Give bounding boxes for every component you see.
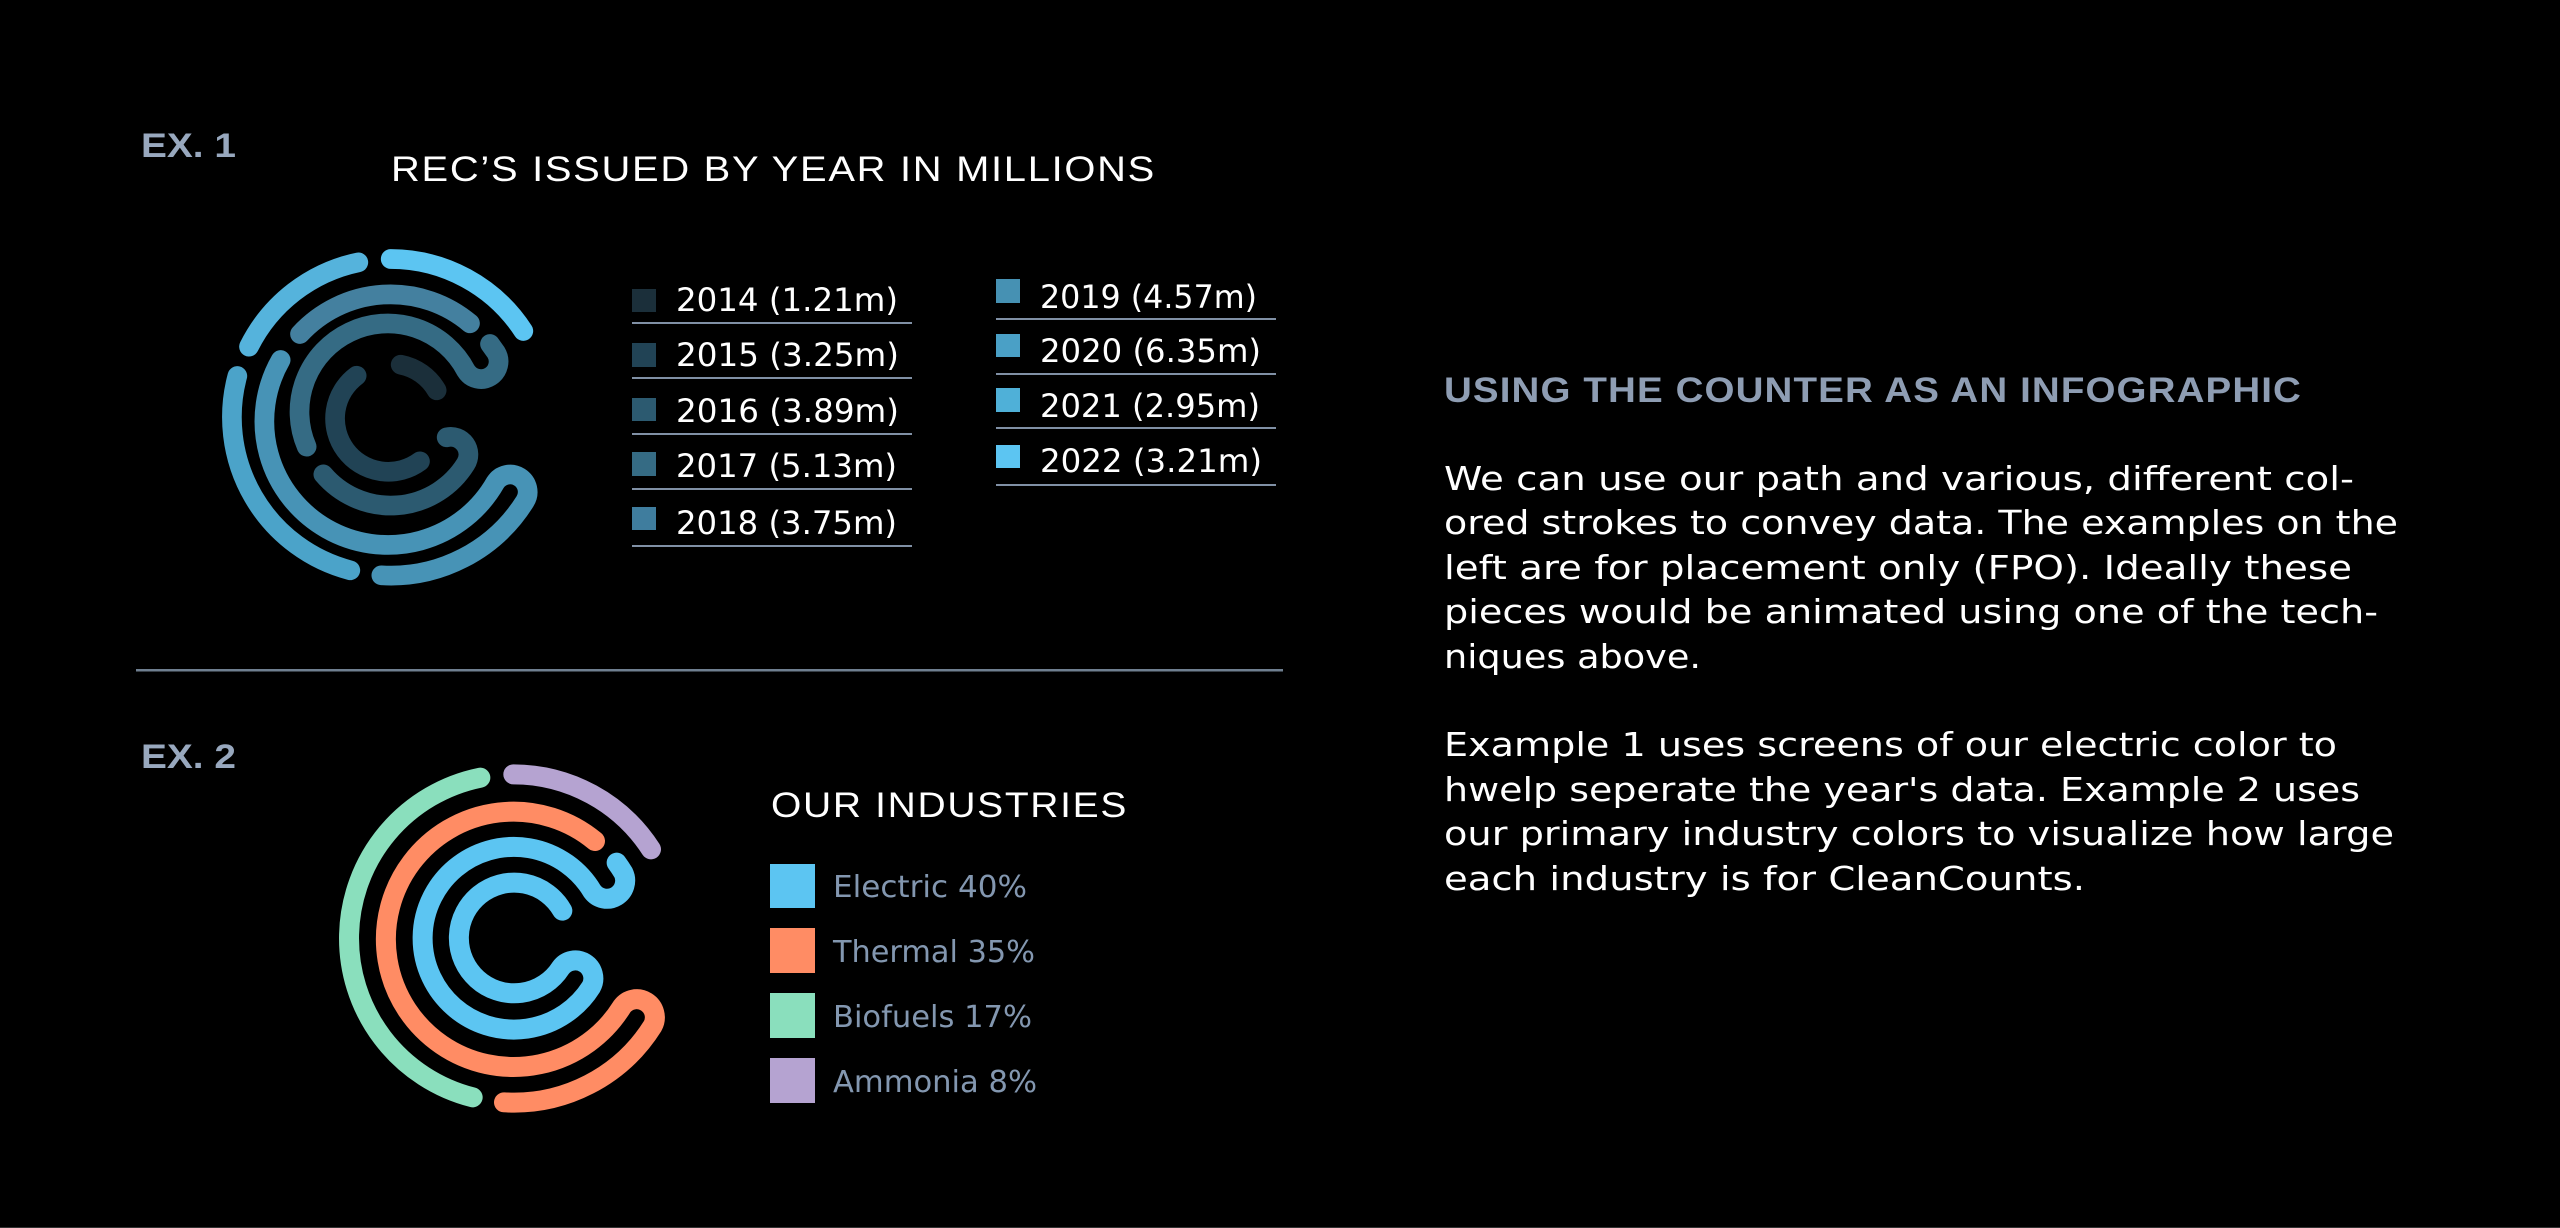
legend row: 2017: 2017 (5.13m) [676,447,897,485]
chart: industries counter ring [349,774,655,1103]
legend row: 2016: 2016 (3.89m) [676,392,899,430]
arc: 2016 [323,437,468,506]
legend: years column 1 [632,281,912,547]
text block: paragraph 2: our primary industry colors to visualize how large [1444,814,2394,853]
chart: REC's by year counter ring [232,259,528,576]
legend row: 2018: 2018 (3.75m) [676,504,897,542]
text block: paragraph 1: We can use our path and various, different col- [1444,459,2354,498]
heading: our industries: OUR INDUSTRIES [771,786,1128,825]
legend row: 2015 [632,336,912,379]
legend row: 2014: 2014 (1.21m) [676,281,898,319]
label: example 2: EX. 2 [141,738,236,776]
legend row: thermal: Thermal 35% [832,935,1035,970]
legend row: 2021: 2021 (2.95m) [1040,387,1260,425]
heading: REC's issued by year: REC’S ISSUED BY YEAR IN MILLIONS [391,150,1156,189]
legend: years column 2 [996,278,1276,486]
legend: industries [770,864,1037,1103]
text block: paragraph 2: hwelp seperate the year's data. Example 2 uses [1444,770,2360,809]
legend row: biofuels [770,993,1032,1038]
legend row: 2020 [996,332,1276,375]
legend row: 2018 [632,504,912,547]
legend row: 2015: 2015 (3.25m) [676,336,899,374]
arc: 2022 [391,259,523,331]
legend row: ammonia: Ammonia 8% [833,1065,1037,1100]
arc: 2017 [299,323,499,447]
arc: 2014 [401,365,437,390]
arc: 2015 [335,376,420,472]
legend row: 2022: 2022 (3.21m) [1040,442,1262,480]
text block: paragraph 1: ored strokes to convey data. The examples on the [1444,503,2398,542]
legend row: 2017 [632,447,912,490]
heading: using the counter: USING THE COUNTER AS AN INFOGRAPHIC [1444,371,2302,410]
text block: paragraph 2: Example 1 uses screens of our electric color to [1444,725,2337,764]
arc: 2019 [264,360,528,576]
arc: 2021 [249,262,358,347]
arc: ammonia [513,774,651,849]
legend row: 2019: 2019 (4.57m) [1040,278,1257,316]
legend row: ammonia [770,1058,1037,1103]
arc: 2020 [232,376,350,570]
text block: paragraph 2 [1444,725,2394,898]
text block: paragraph 2: each industry is for CleanCounts. [1444,859,2085,898]
legend row: 2016 [632,392,912,435]
text block: paragraph 1: left are for placement only (FPO). Ideally these [1444,548,2352,587]
legend row: 2014 [632,281,912,324]
arc: biofuels [349,778,480,1097]
text block: paragraph 1 [1444,459,2398,676]
legend row: biofuels: Biofuels 17% [833,1000,1032,1035]
text block: paragraph 1: niques above. [1444,637,1701,676]
legend row: thermal [770,928,1035,973]
legend row: electric: Electric 40% [833,870,1027,905]
label: example 1: EX. 1 [141,127,236,165]
arc: electric [423,847,625,1030]
arc: 2018 [300,294,470,334]
text block: paragraph 1: pieces would be animated using one of the tech- [1444,592,2378,631]
arc: thermal [386,812,655,1103]
legend row: 2022 [996,442,1276,486]
legend row: 2020: 2020 (6.35m) [1040,332,1261,370]
legend row: electric [770,864,1027,908]
